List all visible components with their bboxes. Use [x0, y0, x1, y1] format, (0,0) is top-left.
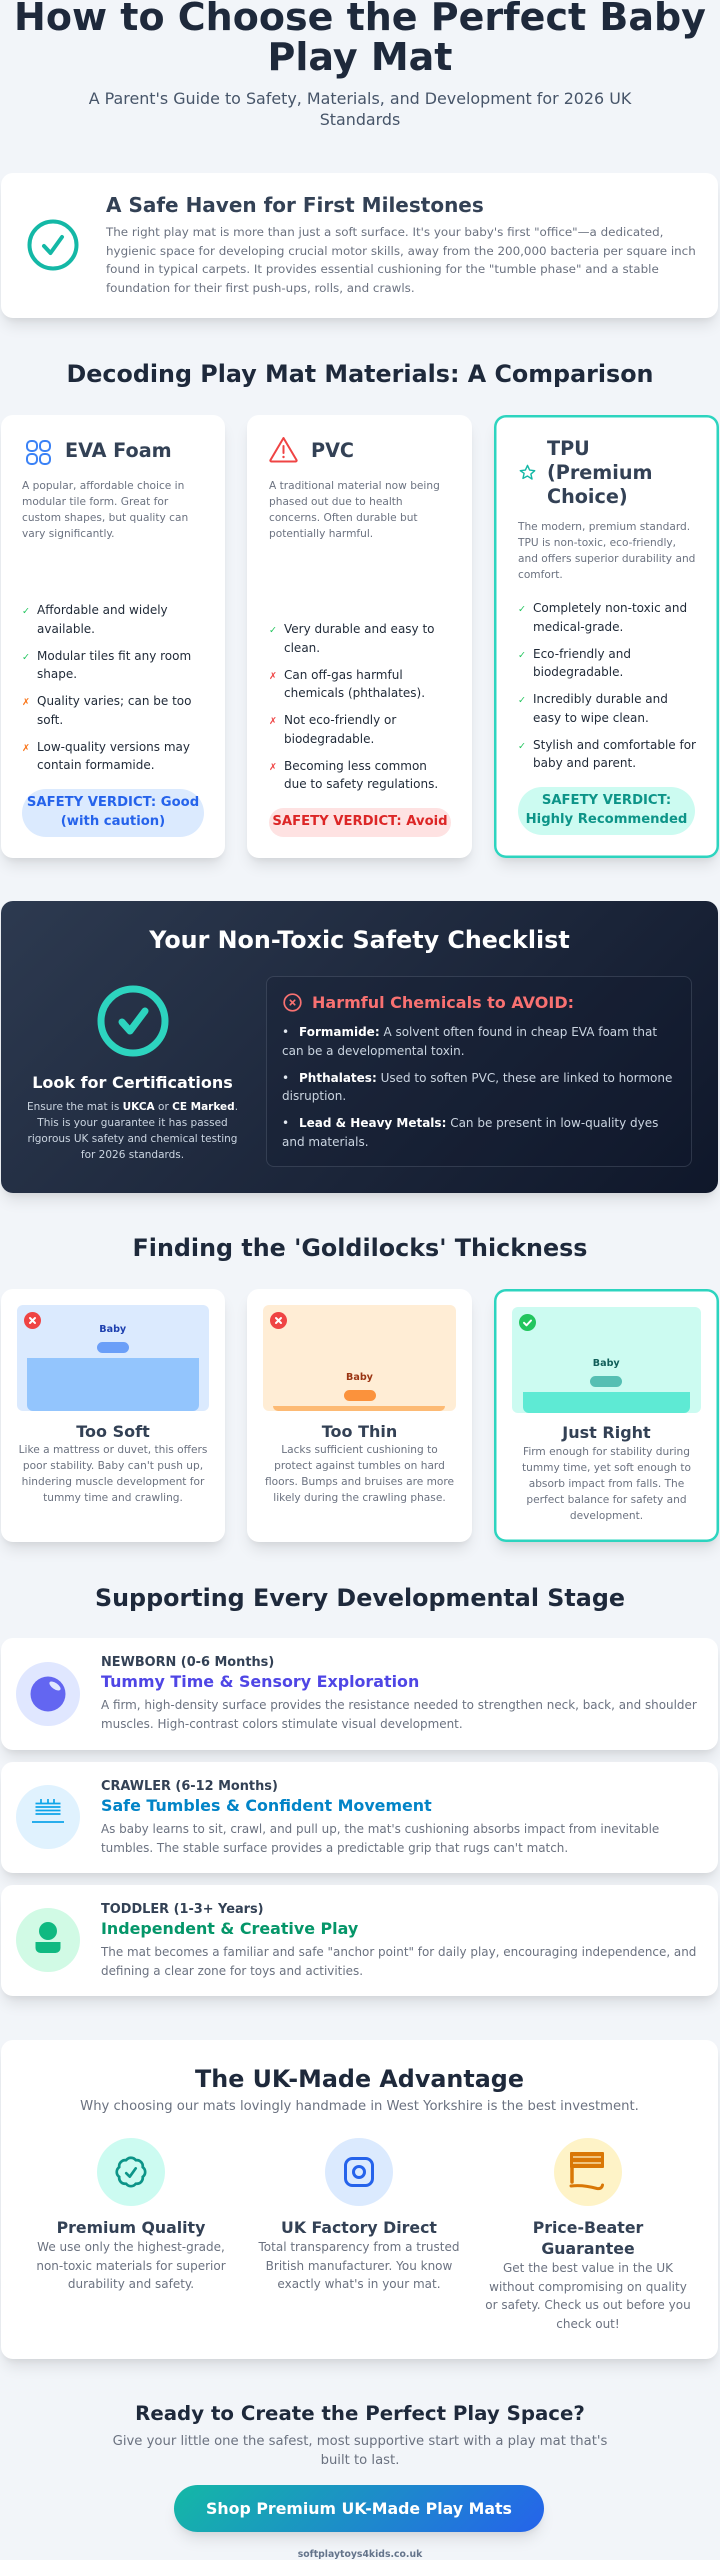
text: TPU description: and offers superior durability and	[518, 553, 695, 565]
text: EVA description	[22, 480, 188, 540]
text: TPU description: TPU is non-toxic, eco-friendly,	[518, 537, 676, 549]
list: EVA pros and cons: ✗	[22, 742, 30, 754]
text: too soft body: tummy time and crawling.	[43, 1492, 183, 1504]
list: PVC pros and cons: Becoming less common	[284, 758, 427, 772]
list: PVC pros and cons: ✗	[269, 762, 277, 772]
icon: toddler figure	[16, 1908, 80, 1972]
text: PVC description: concerns. Often durable but	[269, 512, 418, 524]
label: crawler: CRAWLER (6-12 Months)	[101, 1779, 278, 1794]
list: chemicals: Phthalates: Used to soften PVC, these are linked to hormone	[299, 1070, 672, 1084]
text: call to action	[0, 2432, 720, 2470]
text: price beater body: check out!	[556, 2316, 620, 2330]
list: PVC pros and cons: chemicals (phthalates).	[284, 686, 425, 700]
heading: developmental stages: Supporting Every Developmental Stage	[95, 1584, 625, 1612]
label: baby: Baby	[593, 1358, 620, 1369]
list: PVC pros and cons: due to safety regulations.	[284, 777, 438, 791]
callout: TPU verdict: Highly Recommended	[526, 812, 687, 826]
text: just right body: development.	[570, 1510, 643, 1522]
text: crawler body: tumbles. The stable surface provides a predictable grip that rugs can't match.	[101, 1840, 568, 1854]
heading: premium quality: Premium Quality	[57, 2218, 205, 2236]
text: call to action: Give your little one the safest, most supportive start with a play mat that's	[113, 2434, 607, 2448]
panel: intro	[1, 173, 718, 318]
heading: safe haven: A Safe Haven for First Milestones	[106, 193, 484, 217]
heading: factory direct: UK Factory Direct	[281, 2218, 437, 2236]
illustration: just right	[512, 1307, 700, 1413]
list: EVA pros and cons: ✓	[22, 652, 30, 662]
callout: PVC verdict: SAFETY VERDICT: Avoid	[272, 814, 448, 829]
text: EVA description: modular tile form. Great for	[22, 496, 168, 508]
text: just right body: perfect balance for safety and	[526, 1494, 687, 1506]
panel: too soft	[1, 1289, 225, 1542]
list: TPU pros: ✓	[518, 740, 526, 752]
heading: just right: Just Right	[562, 1423, 651, 1442]
heading: tummy time: Tummy Time & Sensory Exploration	[101, 1672, 419, 1691]
list: EVA pros and cons: Low-quality versions may	[37, 740, 190, 754]
icon: quality badge	[97, 2138, 165, 2206]
panel: EVA foam	[1, 415, 225, 858]
heading: independent play: Independent & Creative Play	[101, 1919, 358, 1938]
heading: safe tumbles: Safe Tumbles & Confident Movement	[101, 1796, 432, 1815]
list: chemicals: disruption.	[282, 1089, 346, 1103]
list: EVA pros and cons: soft.	[37, 712, 63, 726]
text: price beater body: or safety. Check us out before you	[485, 2298, 691, 2312]
footer: website: softplaytoys4kids.co.uk	[298, 2549, 422, 2560]
icon: factory square	[325, 2138, 393, 2206]
list: TPU pros: ✓	[518, 695, 526, 706]
column: premium quality	[36, 2138, 226, 2291]
list: PVC pros and cons: ✓	[269, 625, 277, 636]
list: chemicals: •	[282, 1070, 289, 1084]
text: UK-made subtitle: Why choosing our mats lovingly handmade in West Yorkshire is the best investment.	[80, 2099, 639, 2114]
list: EVA pros and cons: Affordable and widely	[37, 603, 168, 617]
callout: EVA verdict: SAFETY VERDICT: Good	[27, 795, 199, 810]
text: EVA description: A popular, affordable choice in	[22, 480, 184, 492]
list: chemicals: •	[282, 1116, 289, 1130]
mat: thick soft	[27, 1358, 198, 1411]
text: call to action: built to last.	[321, 2452, 399, 2468]
list: chemicals: and materials.	[282, 1134, 369, 1148]
subtitle: A Parent's Guide to Safety, Materials, and Development for 2026 UK	[89, 89, 631, 108]
subtitle: Standards	[320, 110, 400, 129]
text: certifications body	[27, 1101, 238, 1161]
heading: EVA foam: EVA Foam	[65, 439, 172, 462]
heading: checklist: Your Non-Toxic Safety Checklist	[149, 926, 570, 954]
text: certifications body: This is your guarantee it has passed	[37, 1117, 228, 1129]
list: PVC pros and cons: ✗	[269, 716, 277, 727]
heading: TPU: (Premium	[547, 461, 653, 484]
list: chemicals: •	[282, 1025, 289, 1039]
text: premium quality body: durability and safety.	[68, 2277, 194, 2291]
icon: price tag	[554, 2138, 622, 2206]
heading: UK-made: The UK-Made Advantage	[195, 2065, 524, 2093]
mat: just right	[523, 1392, 690, 1413]
panel: toddler	[1, 1885, 718, 1996]
list: EVA pros and cons: ✗	[22, 697, 30, 708]
column: price beater	[485, 2138, 691, 2330]
icon: red cross badge	[24, 1312, 41, 1329]
callout: EVA verdict	[22, 789, 204, 837]
list: PVC pros and cons: Not eco-friendly or	[284, 713, 396, 727]
list: EVA pros and cons: Modular tiles fit any room	[37, 648, 191, 662]
text: newborn body	[101, 1698, 697, 1730]
subtitle	[88, 89, 632, 129]
text: TPU description: comfort.	[518, 569, 563, 581]
title: Play Mat	[268, 35, 452, 79]
button: shop: Shop Premium UK-Made Play Mats	[206, 2499, 512, 2518]
callout: TPU verdict: SAFETY VERDICT:	[542, 793, 671, 808]
text: toddler body: defining a clear zone for toys and activities.	[101, 1964, 363, 1978]
text: too soft body	[19, 1444, 207, 1504]
list: TPU pros: baby and parent.	[533, 756, 636, 770]
text: premium quality body: We use only the highest-grade,	[37, 2240, 225, 2254]
heading: materials comparison: Decoding Play Mat Materials: A Comparison	[66, 360, 654, 388]
label: baby: Baby	[346, 1372, 373, 1383]
list: PVC pros and cons: ✗	[269, 670, 277, 682]
text: too soft body: poor stability. Baby can't push up,	[23, 1460, 203, 1472]
panel: newborn	[1, 1638, 718, 1750]
text: factory direct body: British manufacturer. You know	[266, 2258, 452, 2272]
button: shop	[174, 2485, 544, 2532]
text: too thin body: likely during the crawling phase.	[273, 1492, 446, 1504]
list: EVA pros and cons: Quality varies; can be too	[37, 694, 191, 708]
heading: certifications: Look for Certifications	[32, 1073, 233, 1092]
list: EVA pros and cons: shape.	[37, 667, 77, 681]
icon: cushion layers	[16, 1785, 80, 1849]
heading: price beater: Guarantee	[541, 2238, 635, 2258]
text: just right body	[522, 1446, 691, 1522]
list: TPU pros: Eco-friendly and	[533, 646, 631, 660]
illustration: too soft	[16, 1305, 209, 1411]
text: intro body: hygienic space for developing crucial motor skills, away from the 200,000 bacteria per square inch	[106, 244, 696, 258]
icon: green check badge	[519, 1314, 536, 1331]
text: too thin body	[265, 1444, 454, 1504]
text: EVA description: vary significantly.	[22, 528, 115, 540]
text: too thin body: floors. Bumps and bruises are more	[265, 1476, 454, 1488]
baby shape	[96, 1342, 128, 1353]
heading: TPU: TPU	[547, 437, 590, 460]
text: intro body: The right play mat is more than just a soft surface. It's your baby's first "office"—a dedicated,	[106, 225, 663, 239]
text: crawler body	[101, 1822, 659, 1854]
heading: PVC: PVC	[311, 439, 354, 462]
text: premium quality body: non-toxic materials for superior	[36, 2258, 226, 2272]
list: PVC pros and cons: biodegradable.	[284, 732, 374, 746]
text: PVC description	[269, 480, 440, 540]
callout: PVC verdict	[269, 808, 451, 837]
panel: safety checklist	[1, 901, 718, 1193]
list: TPU pros: ✓	[518, 650, 526, 660]
text: PVC description: A traditional material now being	[269, 480, 440, 492]
list: chemicals: can be a developmental toxin.	[282, 1044, 465, 1058]
heading: too thin: Too Thin	[322, 1422, 397, 1441]
text: price beater body: without compromising on quality	[489, 2280, 687, 2294]
icon: red cross badge	[270, 1312, 287, 1329]
text: too soft body: Like a mattress or duvet, this offers	[19, 1444, 207, 1456]
icon: ball	[16, 1662, 80, 1726]
panel: UK-made advantage	[1, 2040, 718, 2359]
heading: too soft: Too Soft	[76, 1422, 150, 1441]
text: certifications body: for 2026 standards.	[81, 1149, 184, 1161]
panel: just right	[494, 1289, 719, 1542]
text: TPU description	[518, 521, 695, 581]
icon: certification check	[98, 986, 168, 1056]
panel: harmful chemicals	[266, 976, 692, 1167]
text: EVA description: custom shapes, but quality can	[22, 512, 188, 524]
label: toddler: TODDLER (1-3+ Years)	[101, 1902, 264, 1917]
text: factory direct body	[258, 2240, 459, 2291]
text: too thin body: protect against tumbles on hard	[274, 1460, 445, 1472]
text: PVC description: phased out due to health	[269, 496, 403, 508]
icon: check circle	[28, 220, 78, 270]
icon: warning triangle	[269, 437, 298, 462]
text: just right body: Firm enough for stability during	[523, 1446, 690, 1458]
panel: PVC	[247, 415, 472, 858]
list: TPU pros: biodegradable.	[533, 665, 623, 679]
text: intro body	[106, 225, 696, 295]
text: too soft body: hindering muscle development for	[22, 1476, 204, 1488]
list: PVC pros and cons: Can off-gas harmful	[284, 668, 403, 682]
list: TPU pros: medical-grade.	[533, 620, 623, 634]
icon: x circle	[283, 993, 302, 1012]
list: TPU pros: ✓	[518, 604, 526, 615]
list: EVA pros and cons: available.	[37, 622, 95, 636]
baby shape	[590, 1376, 622, 1387]
list: chemicals	[282, 1025, 672, 1148]
list: chemicals: Lead & Heavy Metals: Can be present in low-quality dyes	[299, 1116, 658, 1130]
text: price beater body: Get the best value in the UK	[503, 2261, 673, 2275]
text: intro body: found in typical carpets. It provides essential cushioning for the "tumble phase" and a stable	[106, 262, 659, 276]
list: TPU pros: Stylish and comfortable for	[533, 738, 696, 752]
panel: too thin	[247, 1289, 472, 1542]
text: just right body: absorb impact from falls. The	[529, 1478, 684, 1490]
icon: grid	[26, 440, 51, 465]
panel: TPU premium choice	[494, 415, 719, 858]
text: too thin body: Lacks sufficient cushioning to	[281, 1444, 438, 1456]
text: toddler body	[100, 1945, 696, 1978]
callout: TPU verdict	[518, 787, 695, 835]
list: TPU pros	[518, 601, 696, 770]
text: newborn body: muscles. High-contrast colors stimulate visual development.	[101, 1716, 463, 1730]
heading: TPU	[547, 437, 653, 508]
baby shape	[344, 1390, 376, 1401]
panel: crawler	[1, 1762, 718, 1873]
list: EVA pros and cons: ✓	[22, 606, 30, 617]
heading: call to action: Ready to Create the Perfect Play Space?	[135, 2402, 585, 2425]
text: factory direct body: Total transparency from a trusted	[259, 2240, 459, 2254]
text: TPU description: The modern, premium standard.	[518, 521, 690, 533]
list: chemicals: Formamide: A solvent often found in cheap EVA foam that	[299, 1025, 657, 1039]
heading: goldilocks thickness: Finding the 'Goldilocks' Thickness	[133, 1234, 587, 1262]
heading: harmful chemicals: Harmful Chemicals to AVOID:	[312, 993, 574, 1012]
list: EVA pros and cons: contain formamide.	[37, 758, 155, 772]
list: TPU pros: Incredibly durable and	[533, 692, 668, 706]
text: just right body: tummy time, yet soft enough to	[522, 1462, 691, 1474]
text: certifications body: Ensure the mat is UKCA or CE Marked.	[27, 1101, 238, 1113]
text: crawler body: As baby learns to sit, crawl, and pull up, the mat's cushioning absorbs impact from inevitable	[101, 1822, 659, 1836]
heading: price beater: Price-Beater	[533, 2218, 643, 2236]
column: factory direct	[258, 2138, 459, 2291]
text: price beater body	[485, 2261, 691, 2330]
text: factory direct body: exactly what's in your mat.	[277, 2277, 441, 2291]
list: TPU pros: Completely non-toxic and	[533, 601, 687, 615]
text: newborn body: A firm, high-density surface provides the resistance needed to strengthen neck, back, and shoulder	[101, 1698, 697, 1712]
heading: TPU: Choice)	[547, 485, 628, 508]
text: PVC description: potentially harmful.	[269, 528, 373, 540]
list: PVC pros and cons: clean.	[284, 640, 320, 654]
text: certifications body: rigorous UK safety and chemical testing	[28, 1133, 237, 1145]
illustration: too thin	[263, 1305, 456, 1411]
label: baby: Baby	[99, 1324, 126, 1335]
list: PVC pros and cons: Very durable and easy to	[284, 622, 435, 636]
mat: thin	[273, 1406, 445, 1411]
heading: price beater	[533, 2218, 644, 2258]
text: premium quality body	[36, 2240, 226, 2291]
label: newborn: NEWBORN (0-6 Months)	[101, 1655, 274, 1670]
text: intro body: foundation for their first push-ups, rolls, and crawls.	[106, 281, 415, 295]
list: PVC pros and cons	[269, 622, 438, 791]
list: EVA pros and cons	[22, 603, 191, 772]
text: toddler body: The mat becomes a familiar and safe "anchor point" for daily play, encouraging independence, and	[101, 1945, 696, 1959]
callout: EVA verdict: (with caution)	[61, 814, 165, 828]
list: TPU pros: easy to wipe clean.	[533, 710, 649, 724]
icon: star	[520, 464, 536, 480]
title	[14, 0, 706, 79]
